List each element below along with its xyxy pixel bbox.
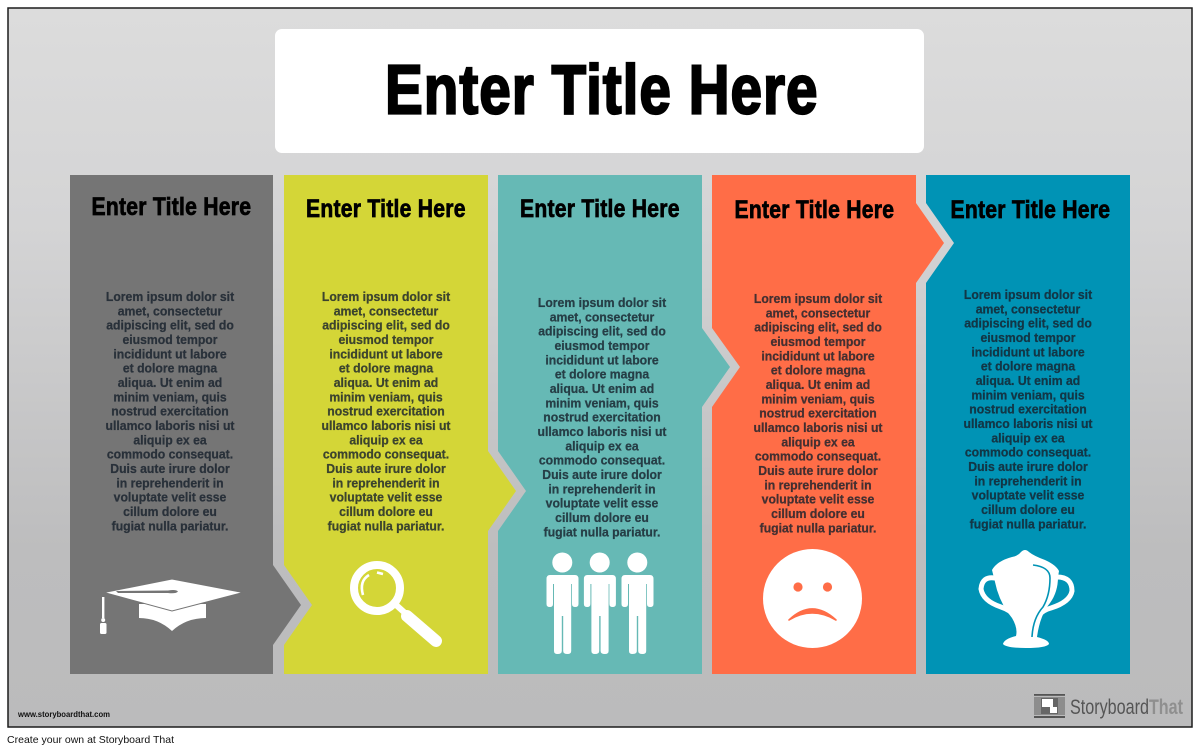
- text block: blue column: voluptate velit esse: [972, 489, 1084, 503]
- text block: blue column: ullamco laboris nisi ut: [964, 417, 1092, 431]
- text block: grey column: aliqua. Ut enim ad: [118, 376, 222, 390]
- text block: grey column: Lorem ipsum dolor sit: [106, 290, 234, 304]
- text block: orange column: incididunt ut labore: [761, 349, 875, 363]
- text block: grey column: fugiat nulla pariatur.: [112, 519, 228, 533]
- text block: orange column: eiusmod tempor: [770, 335, 866, 349]
- text block: grey column: minim veniam, quis: [113, 390, 227, 404]
- text block: blue column: eiusmod tempor: [980, 331, 1076, 345]
- text block: yellow column: amet, consectetur: [334, 304, 438, 318]
- text block: teal column: cillum dolore eu: [555, 511, 649, 525]
- text block: teal column: minim veniam, quis: [545, 396, 659, 410]
- text block: yellow column: fugiat nulla pariatur.: [328, 519, 444, 533]
- icon: three people: [546, 552, 654, 654]
- text block: blue column: commodo consequat.: [965, 446, 1091, 460]
- heading: blue column: Enter Title Here: [950, 195, 1110, 223]
- text block: yellow column: incididunt ut labore: [329, 347, 443, 361]
- text block: grey column: commodo consequat.: [107, 448, 233, 462]
- text block: teal column: voluptate velit esse: [546, 497, 658, 511]
- text block: yellow column: et dolore magna: [339, 362, 433, 376]
- heading: orange column: Enter Title Here: [734, 195, 894, 223]
- text block: yellow column: eiusmod tempor: [338, 333, 434, 347]
- text block: orange column: aliquip ex ea: [781, 435, 855, 449]
- text block: orange column: Duis aute irure dolor: [758, 464, 878, 478]
- text block: grey column: aliquip ex ea: [133, 433, 207, 447]
- heading: teal column: Enter Title Here: [520, 194, 680, 222]
- text block: blue column: incididunt ut labore: [971, 345, 1085, 359]
- logo: Storyboard That: [1034, 694, 1183, 719]
- text block: teal column: [538, 296, 666, 539]
- text block: blue column: amet, consectetur: [976, 302, 1080, 316]
- text block: blue column: minim veniam, quis: [971, 388, 1085, 402]
- text block: blue column: cillum dolore eu: [981, 503, 1075, 517]
- icon: trophy: [981, 550, 1072, 648]
- text block: orange column: in reprehenderit in: [764, 478, 872, 492]
- text block: yellow column: cillum dolore eu: [339, 505, 433, 519]
- text block: grey column: [106, 290, 234, 533]
- text block: orange column: nostrud exercitation: [759, 407, 877, 421]
- text block: yellow column: Duis aute irure dolor: [326, 462, 446, 476]
- text block: teal column: amet, consectetur: [550, 310, 654, 324]
- text block: blue column: in reprehenderit in: [974, 474, 1082, 488]
- text block: teal column: in reprehenderit in: [548, 482, 656, 496]
- text block: yellow column: nostrud exercitation: [327, 405, 445, 419]
- panel: grey column: [70, 175, 301, 674]
- text block: teal column: adipiscing elit, sed do: [538, 325, 666, 339]
- text block: orange column: Lorem ipsum dolor sit: [754, 292, 882, 306]
- text block: grey column: adipiscing elit, sed do: [106, 319, 234, 333]
- logo wordmark: StoryboardThat: [1070, 696, 1183, 719]
- main title: Enter Title Here: [385, 51, 819, 129]
- icon: sad face: [763, 549, 862, 648]
- text block: orange column: adipiscing elit, sed do: [754, 321, 882, 335]
- text block: teal column: nostrud exercitation: [543, 411, 661, 425]
- text block: orange column: amet, consectetur: [766, 306, 870, 320]
- panel: teal column: [498, 175, 730, 674]
- icon: graduation cap: [100, 579, 243, 634]
- text block: teal column: eiusmod tempor: [554, 339, 650, 353]
- text block: blue column: aliqua. Ut enim ad: [976, 374, 1080, 388]
- text block: yellow column: [322, 290, 450, 533]
- text block: blue column: et dolore magna: [981, 360, 1075, 374]
- text block: orange column: fugiat nulla pariatur.: [760, 521, 876, 535]
- text block: yellow column: voluptate velit esse: [330, 491, 442, 505]
- text block: blue column: nostrud exercitation: [969, 403, 1087, 417]
- text block: grey column: cillum dolore eu: [123, 505, 217, 519]
- text block: grey column: ullamco laboris nisi ut: [106, 419, 234, 433]
- text block: orange column: [754, 292, 882, 535]
- text block: teal column: incididunt ut labore: [545, 353, 659, 367]
- panel: blue column: [926, 175, 1130, 674]
- text block: blue column: aliquip ex ea: [991, 431, 1065, 445]
- text block: teal column: Lorem ipsum dolor sit: [538, 296, 666, 310]
- text block: yellow column: ullamco laboris nisi ut: [322, 419, 450, 433]
- text block: yellow column: commodo consequat.: [323, 448, 449, 462]
- text block: yellow column: in reprehenderit in: [332, 476, 440, 490]
- text block: yellow column: adipiscing elit, sed do: [322, 319, 450, 333]
- icon: magnifying glass: [354, 565, 436, 641]
- text block: grey column: nostrud exercitation: [111, 405, 229, 419]
- text block: teal column: ullamco laboris nisi ut: [538, 425, 666, 439]
- text block: blue column: Duis aute irure dolor: [968, 460, 1088, 474]
- text block: orange column: voluptate velit esse: [762, 493, 874, 507]
- text block: grey column: amet, consectetur: [118, 304, 222, 318]
- footer website text: www.storyboardthat.com: [17, 709, 110, 719]
- panel: orange column: [712, 175, 944, 674]
- text block: orange column: ullamco laboris nisi ut: [754, 421, 882, 435]
- text block: teal column: aliquip ex ea: [565, 439, 639, 453]
- text block: grey column: Duis aute irure dolor: [110, 462, 230, 476]
- text block: grey column: in reprehenderit in: [116, 476, 224, 490]
- text block: grey column: incididunt ut labore: [113, 347, 227, 361]
- text block: orange column: cillum dolore eu: [771, 507, 865, 521]
- text block: blue column: fugiat nulla pariatur.: [970, 517, 1086, 531]
- text block: teal column: aliqua. Ut enim ad: [550, 382, 654, 396]
- heading: grey column: Enter Title Here: [92, 192, 251, 220]
- text block: yellow column: aliqua. Ut enim ad: [334, 376, 438, 390]
- title box: [275, 29, 924, 153]
- text block: grey column: eiusmod tempor: [122, 333, 218, 347]
- text block: yellow column: minim veniam, quis: [329, 390, 443, 404]
- text block: blue column: Lorem ipsum dolor sit: [964, 288, 1092, 302]
- text block: orange column: et dolore magna: [771, 364, 865, 378]
- text block: yellow column: aliquip ex ea: [349, 433, 423, 447]
- text block: blue column: [964, 288, 1092, 531]
- text block: grey column: et dolore magna: [123, 362, 217, 376]
- heading: yellow column: Enter Title Here: [306, 194, 466, 222]
- caption: create your own: Create your own at Storyboard That: [7, 734, 174, 746]
- text block: yellow column: Lorem ipsum dolor sit: [322, 290, 450, 304]
- text block: orange column: commodo consequat.: [755, 450, 881, 464]
- text block: teal column: commodo consequat.: [539, 454, 665, 468]
- text block: grey column: voluptate velit esse: [114, 491, 226, 505]
- panel: yellow column: [284, 175, 516, 674]
- text block: blue column: adipiscing elit, sed do: [964, 317, 1092, 331]
- text block: teal column: et dolore magna: [555, 368, 649, 382]
- text block: orange column: minim veniam, quis: [761, 392, 875, 406]
- text block: teal column: Duis aute irure dolor: [542, 468, 662, 482]
- text block: orange column: aliqua. Ut enim ad: [766, 378, 870, 392]
- text block: teal column: fugiat nulla pariatur.: [544, 525, 660, 539]
